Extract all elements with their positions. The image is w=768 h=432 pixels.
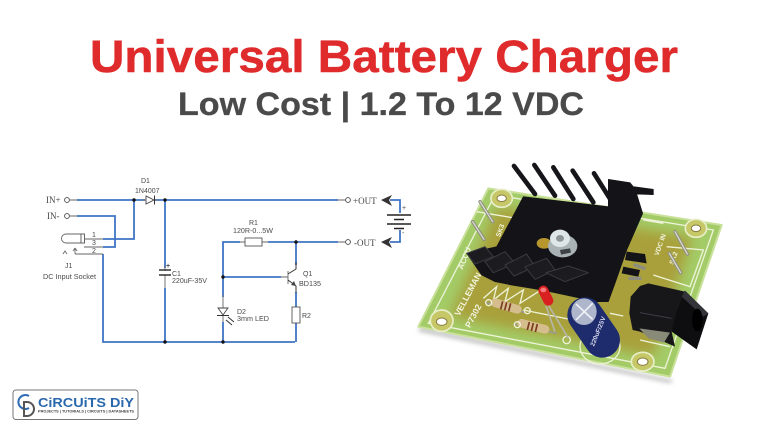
- logo wordmark: CiRCUiTS DiY: [38, 396, 135, 410]
- wires: [77, 200, 338, 342]
- logo frame: [13, 390, 138, 420]
- upper cooling fins: [514, 165, 613, 204]
- board labels: ACCU: [456, 246, 473, 271]
- photo: assembled charger board: [418, 165, 722, 383]
- J1 DC input socket: 2: [92, 248, 96, 255]
- logo tagline: PROJECTS | TUTORIALS | CIRCUITS | DATASHEETS: [38, 410, 134, 414]
- board labels: [452, 223, 680, 329]
- resistors: [486, 300, 570, 344]
- heat sink body: [467, 179, 653, 302]
- red LED: [540, 288, 568, 338]
- board labels: SK2: [669, 251, 680, 266]
- circuit board: [418, 188, 722, 377]
- C1 capacitor: 220uF-35V: [172, 278, 207, 285]
- mounting holes: [430, 189, 707, 371]
- DC power jack: [629, 283, 708, 349]
- R2 resistor: R2: [302, 313, 311, 320]
- board labels: P7302: [463, 302, 484, 329]
- lower fin faces: [467, 247, 588, 282]
- header pins: [473, 202, 687, 278]
- board labels: VELLEMAN: [452, 271, 483, 318]
- Q1 transistor: [281, 262, 321, 293]
- board labels: VDC IN: [654, 233, 668, 257]
- junction dots: [132, 198, 298, 344]
- input terminals: [46, 195, 77, 221]
- electrolytic capacitor: [571, 298, 620, 364]
- board copper tint: [450, 207, 693, 357]
- D1 diode: 1N4007: [135, 188, 160, 195]
- D1 diode: [135, 178, 160, 204]
- battery symbol: [381, 195, 411, 248]
- C1 capacitor: +: [166, 263, 170, 270]
- battery symbol: +: [402, 205, 406, 212]
- board labels: SK3: [495, 223, 506, 238]
- D1 diode: D1: [141, 178, 150, 185]
- R2 resistor: [292, 307, 311, 323]
- R1 resistor: 120R-0...5W: [233, 228, 273, 235]
- J1 DC input socket: [43, 232, 103, 281]
- D2 LED: [217, 295, 269, 325]
- J1 DC input socket: J1: [65, 263, 72, 270]
- R1 resistor: [233, 220, 273, 246]
- side tabs: [622, 252, 647, 277]
- battery symbol: -: [402, 230, 405, 237]
- J1 DC input socket: DC Input Socket: [43, 274, 96, 281]
- circuit schematic: [43, 178, 411, 344]
- C1 capacitor: C1: [172, 271, 181, 278]
- D2 LED: D2: [237, 309, 246, 316]
- electrolytic capacitor: 220uF/25V: [589, 315, 608, 347]
- heat sink: [467, 165, 653, 302]
- C1 capacitor: [159, 263, 207, 288]
- output terminals: +OUT: [353, 196, 377, 206]
- output terminals: -OUT: [354, 238, 376, 248]
- logo: Circuits DIY: [13, 390, 138, 420]
- J1 DC input socket: 1: [92, 232, 96, 239]
- logo icon: [18, 395, 34, 416]
- Q1 transistor: Q1: [303, 271, 312, 278]
- title: Universal Battery Charger: [90, 31, 678, 82]
- Q1 transistor: BD135: [299, 281, 321, 288]
- R1 resistor: R1: [249, 220, 258, 227]
- D2 LED: 3mm LED: [237, 316, 269, 323]
- board shadow: [418, 327, 673, 383]
- screw and bolt: [537, 230, 577, 257]
- output terminals: [338, 196, 377, 248]
- board silkscreen lines: [428, 195, 713, 368]
- J1 DC input socket: 3: [92, 240, 96, 247]
- input terminals: IN-: [47, 211, 60, 221]
- input terminals: IN+: [46, 195, 61, 205]
- subtitle: Low Cost | 1.2 To 12 VDC: [178, 86, 584, 122]
